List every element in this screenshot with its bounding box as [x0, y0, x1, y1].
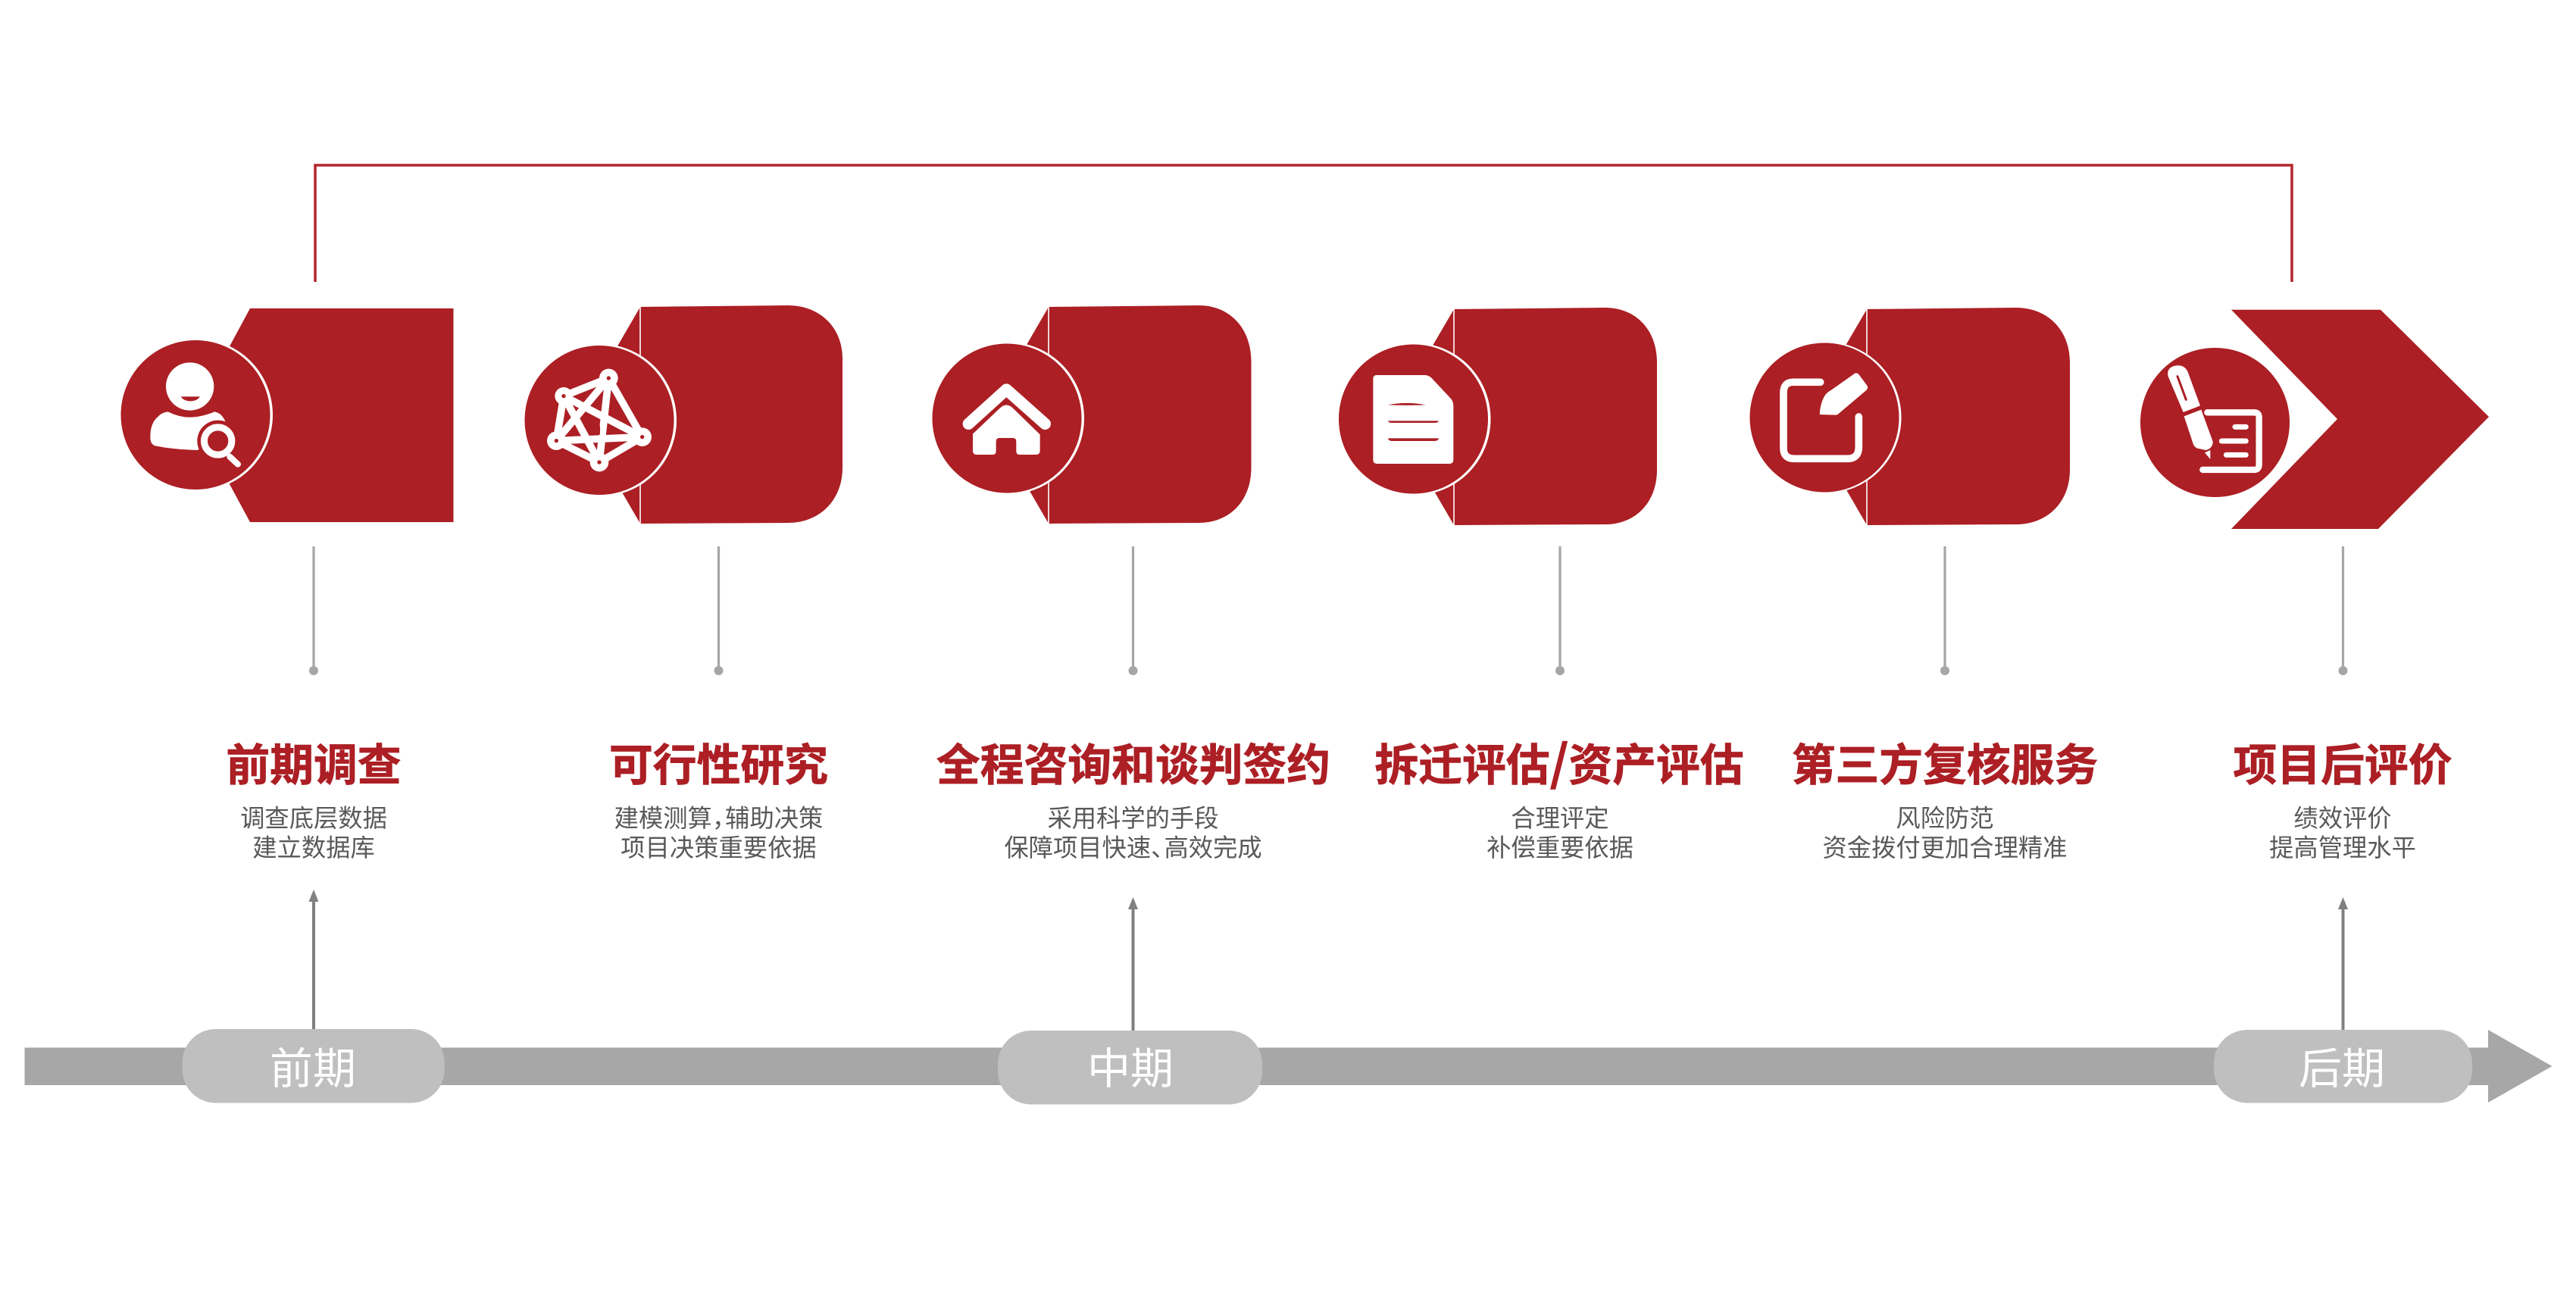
step 3: consulting shape and icon: [932, 305, 1252, 524]
shape: step 4: [1391, 308, 1657, 525]
text block: step 5: [1792, 742, 2098, 862]
text block: step 6: 提高管理水平: [2269, 834, 2416, 862]
timeline arrow: [24, 1030, 2552, 1103]
text block: step 2: 建模测算，辅助决策: [614, 805, 823, 832]
bracket connector: [315, 165, 2292, 282]
shape: step 5: [1804, 308, 2070, 525]
text block: step 2: 可行性研究: [609, 742, 828, 790]
text block: step 4: 拆迁评估/资产评估: [1374, 725, 1744, 795]
text block: step 1: [226, 742, 402, 862]
text block: step 2: [609, 742, 828, 862]
pill: middle stage: 中期: [1087, 1045, 1174, 1093]
step 5: third-party review shape and icon: [1750, 308, 2070, 525]
text block: step 6: 项目后评价: [2234, 742, 2452, 790]
text block: step 1: 建立数据库: [252, 834, 375, 862]
text block: step 4: 补偿重要依据: [1487, 834, 1633, 862]
icon: house: [932, 343, 1084, 494]
step 2: feasibility shape and icon: [524, 305, 843, 524]
step 1: survey shape and icon: [120, 308, 453, 522]
shape: chevron: [2231, 310, 2489, 529]
connector lines with dots: [309, 546, 2347, 675]
shape: step 1: [192, 308, 453, 522]
text block: step 6: 绩效评价: [2293, 805, 2392, 832]
step 6: post evaluation chevron and icon: [2140, 310, 2489, 529]
icon: edit: [1750, 342, 1902, 493]
arrow: early stage up: [309, 890, 318, 1031]
text block: step 4: [1374, 725, 1744, 862]
text block: step 3: [936, 742, 1330, 862]
text block: step 1: 调查底层数据: [240, 805, 387, 832]
text block: step 2: 项目决策重要依据: [621, 834, 817, 862]
step 4: appraisal shape and icon: [1338, 308, 1657, 525]
text block: step 1: 前期调查: [226, 742, 402, 790]
text block: step 5: 风险防范: [1896, 805, 1994, 832]
text block: step 6: [2234, 742, 2452, 862]
pill: middle stage: [998, 1031, 1262, 1105]
arrow: middle stage up: [1128, 897, 1138, 1031]
pill: early stage: [183, 1029, 445, 1103]
text block: step 5: 第三方复核服务: [1792, 742, 2098, 790]
pill: early stage: 前期: [270, 1045, 356, 1093]
text block: step 3: 采用科学的手段: [1047, 805, 1219, 832]
icon: network: [524, 344, 677, 496]
pill: late stage: [2214, 1030, 2472, 1103]
pill: late stage: 后期: [2299, 1045, 2385, 1093]
text block: step 4: 合理评定: [1511, 805, 1609, 832]
shape: step 3: [986, 305, 1252, 524]
shape: step 2: [577, 305, 843, 524]
icon: person with magnifier: [120, 339, 273, 491]
text block: step 3: 保障项目快速、高效完成: [1004, 834, 1262, 862]
icon: document: [1338, 343, 1491, 496]
text block: step 3: 全程咨询和谈判签约: [936, 742, 1330, 790]
arrow: late stage up: [2338, 897, 2348, 1031]
text block: step 5: 资金拨付更加合理精准: [1823, 834, 2067, 862]
icon: pen and paper: [2140, 348, 2290, 497]
